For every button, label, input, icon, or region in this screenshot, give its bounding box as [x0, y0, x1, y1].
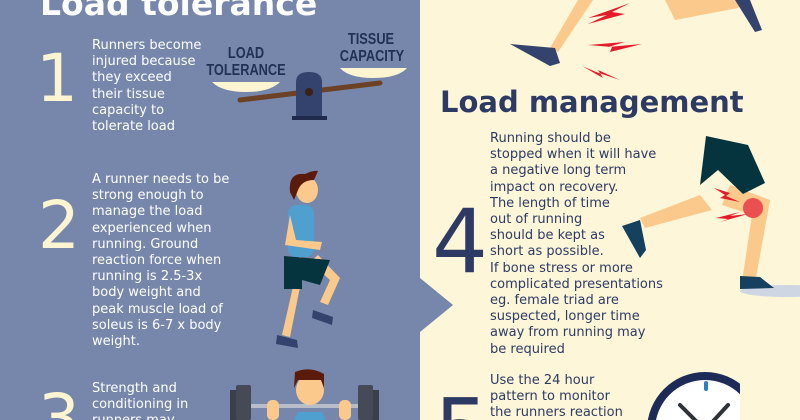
text block 4: should be kept as — [490, 228, 605, 243]
text block 4: eg. female triad are — [490, 293, 619, 308]
text block 1: Runners become — [92, 38, 201, 53]
text block 4: stopped when it will have — [490, 147, 656, 162]
panel: load tolerance — [0, 0, 420, 420]
text block 5 — [490, 373, 623, 420]
text block 4: If bone stress or more — [490, 261, 633, 276]
number 2: 2 — [38, 187, 80, 264]
text block 2: weight. — [92, 334, 140, 349]
text block 4: out of running — [490, 212, 582, 227]
text block 2: manage the load — [92, 204, 202, 219]
icon: seesaw scale: TOLERANCE — [206, 62, 286, 79]
icon: seesaw scale: LOAD — [228, 45, 264, 62]
text block 3 — [92, 381, 188, 420]
text block 4: The length of time — [490, 196, 610, 211]
text block 4: Running should be — [490, 131, 611, 146]
text block 2: reaction force when — [92, 253, 221, 268]
icon: injured knee — [622, 136, 800, 297]
text block 4: impact on recovery. — [490, 180, 618, 195]
text block 2: running is 2.5-3x — [92, 269, 202, 284]
text block 2: running. Ground — [92, 237, 198, 252]
text block 2: peak muscle load of — [92, 302, 223, 317]
number 4: 4 — [432, 190, 488, 293]
text block 5: the runners reaction — [490, 405, 623, 420]
icon: running legs with pain — [510, 0, 762, 80]
text block 1 — [92, 38, 201, 134]
text block 4: complicated presentations — [490, 277, 663, 292]
text block 5: Use the 24 hour — [490, 373, 594, 388]
text block 4: suspected, longer time — [490, 309, 640, 324]
title: load management: Load management — [440, 85, 744, 119]
icon: seesaw scale: TISSUE — [348, 31, 394, 48]
text block 1: their tissue — [92, 87, 165, 102]
arrow: pointer triangle — [420, 278, 453, 332]
text block 4: a negative long term — [490, 163, 626, 178]
text block 2: experienced when — [92, 221, 212, 236]
text block 2: soleus is 6-7 x body — [92, 318, 221, 333]
icon: runner high knee — [276, 170, 340, 348]
text block 1: capacity to — [92, 103, 164, 118]
text block 5: pattern to monitor — [490, 389, 610, 404]
text block 4: be required — [490, 342, 565, 357]
icon: weightlifter — [230, 369, 379, 420]
text block 2 — [92, 172, 229, 349]
icon: seesaw scale: CAPACITY — [340, 48, 404, 65]
icon: seesaw scale — [206, 31, 407, 120]
number 1: 1 — [36, 40, 78, 117]
icon: clock — [648, 372, 740, 420]
text block 1: they exceed — [92, 70, 172, 85]
text block 2: body weight and — [92, 285, 201, 300]
text block 3: Strength and — [92, 381, 177, 396]
text block 1: injured because — [92, 54, 196, 69]
text block 4 — [490, 131, 663, 357]
text block 4: away from running may — [490, 325, 645, 340]
text block 4: short as possible. — [490, 244, 604, 259]
text block 3: conditioning in — [92, 397, 188, 412]
text block 2: A runner needs to be — [92, 172, 229, 187]
text block 1: tolerate load — [92, 119, 175, 134]
text block 2: strong enough to — [92, 188, 204, 203]
